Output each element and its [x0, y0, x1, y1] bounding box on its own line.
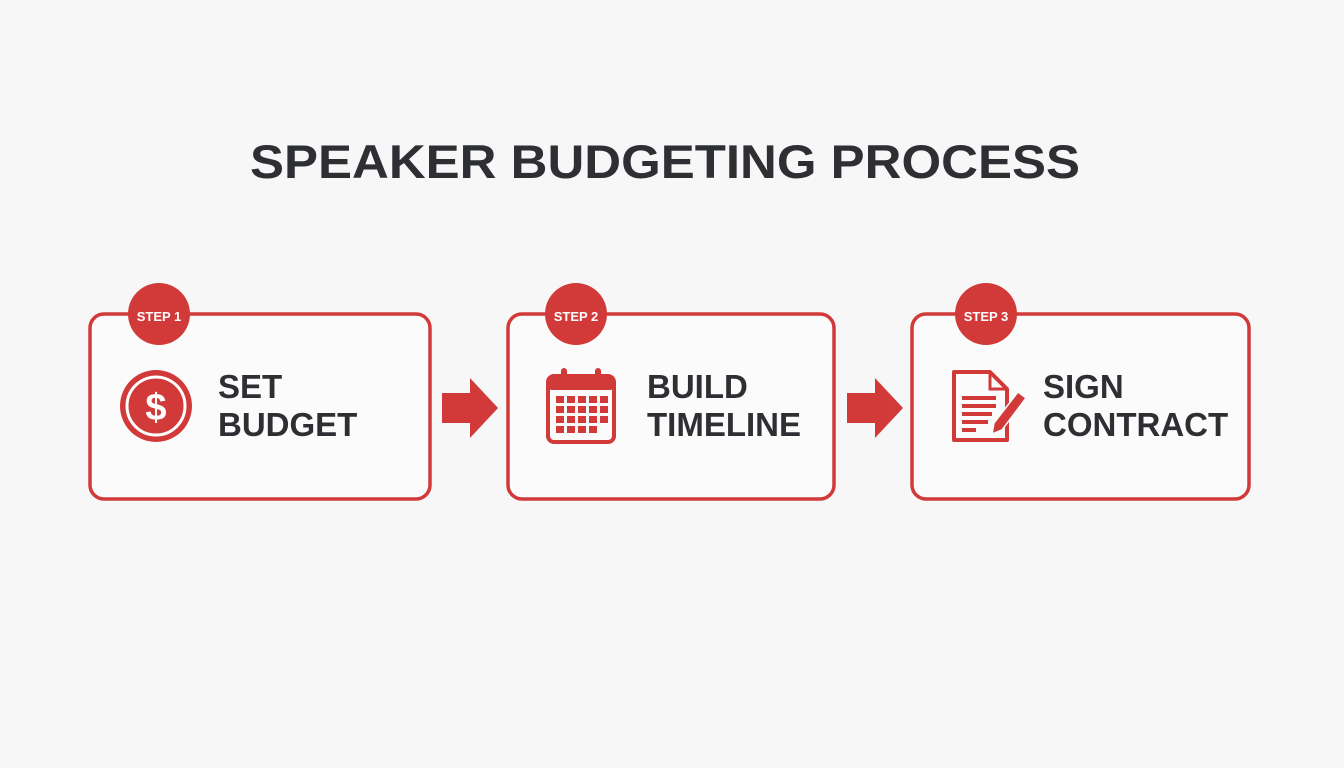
panel: step 2 — [508, 283, 834, 499]
heading: build timeline: TIMELINE — [647, 406, 801, 443]
heading: sign contract: CONTRACT — [1043, 406, 1228, 443]
badge: step 1: STEP 1 — [137, 309, 181, 324]
badge: step 1 — [128, 283, 190, 345]
icon: dollar coin: $ — [145, 387, 167, 429]
badge: step 3: STEP 3 — [964, 309, 1008, 324]
icon: calendar — [548, 368, 614, 442]
arrow 2 — [847, 378, 903, 438]
heading: build timeline: BUILD — [647, 368, 748, 405]
heading: set budget: BUDGET — [218, 406, 357, 443]
heading: sign contract: SIGN — [1043, 368, 1124, 405]
arrow 1 — [442, 378, 498, 438]
badge: step 2 — [545, 283, 607, 345]
heading: set budget: SET — [218, 368, 282, 405]
icon: dollar coin — [120, 370, 192, 442]
icon: contract document — [954, 372, 1026, 440]
panel: step 3 — [912, 283, 1249, 499]
badge: step 2: STEP 2 — [554, 309, 598, 324]
title: SPEAKER BUDGETING PROCESS — [250, 135, 1080, 188]
badge: step 3 — [955, 283, 1017, 345]
panel: step 1 — [90, 283, 430, 499]
